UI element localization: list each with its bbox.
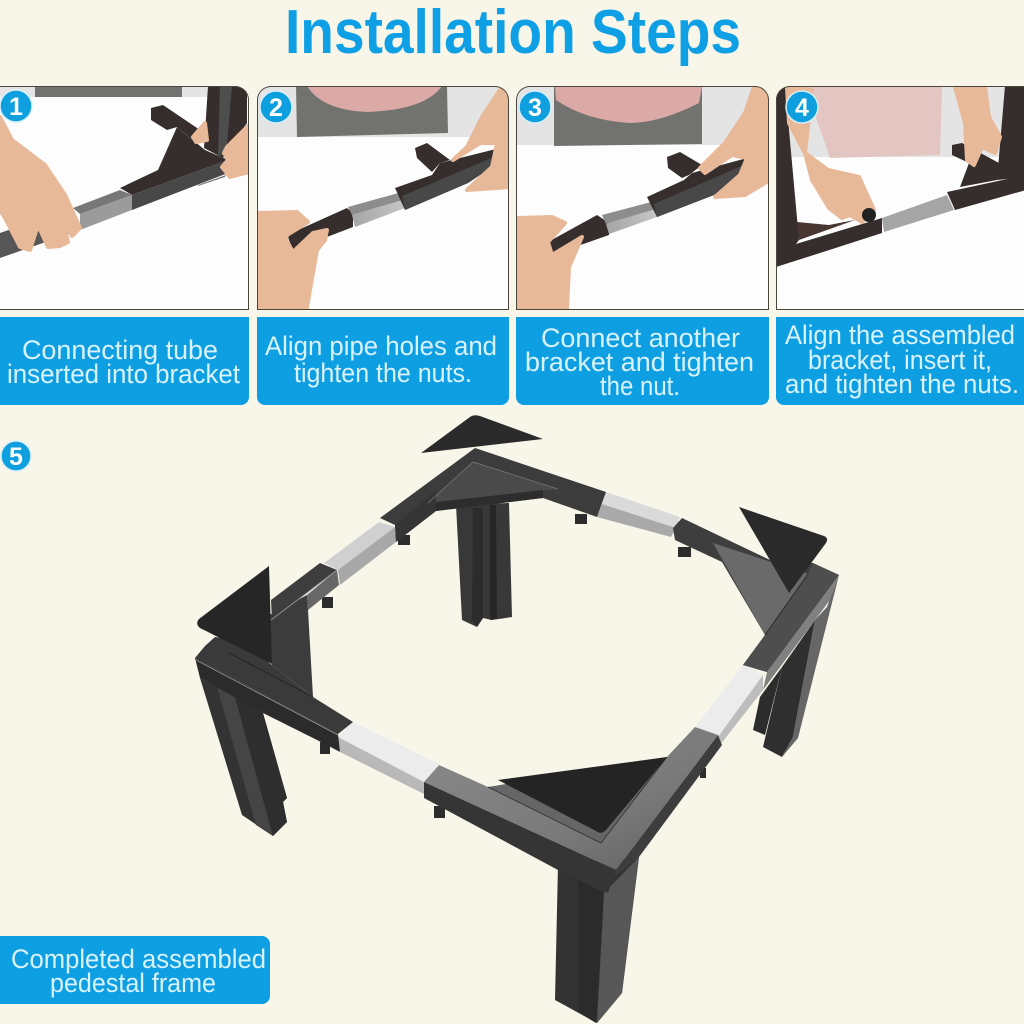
panel: step 3 photo: 3 bbox=[528, 94, 542, 122]
caption: step 5 bbox=[0, 936, 270, 1004]
anti-slip pad: right bbox=[739, 507, 827, 593]
panel: step 4 photo bbox=[776, 86, 1024, 310]
right leg bbox=[753, 575, 839, 757]
caption: step 2 bbox=[257, 317, 509, 405]
anti-slip pad: left bbox=[197, 566, 272, 664]
caption: step 5: Completed assembled bbox=[11, 944, 266, 974]
caption: step 1 bbox=[0, 317, 249, 405]
step 5 number badge: 5 bbox=[9, 443, 23, 471]
caption: step 5: pedestal frame bbox=[50, 968, 216, 998]
caption: step 3: bracket and tighten bbox=[525, 347, 754, 377]
front leg bbox=[555, 857, 639, 1023]
front bracket bbox=[424, 727, 722, 893]
caption: step 4: Align the assembled bbox=[785, 320, 1015, 350]
caption: step 1: inserted into bracket bbox=[7, 359, 240, 389]
anti-slip pad: front bbox=[498, 757, 667, 833]
anti-slip pad: top bbox=[421, 415, 543, 453]
panel: step 4 photo: 4 bbox=[795, 94, 809, 122]
panel: step 3 photo bbox=[516, 86, 770, 312]
panel: step 2 photo: 2 bbox=[269, 94, 283, 122]
caption: step 3 bbox=[516, 317, 769, 405]
left leg bbox=[200, 678, 287, 836]
adjuster bolts bbox=[320, 514, 706, 818]
right bracket bbox=[673, 518, 839, 690]
illustration: assembled pedestal frame bbox=[195, 415, 839, 1023]
caption: step 4 bbox=[776, 317, 1024, 405]
silver tubes bbox=[324, 492, 763, 794]
panel: step 1 photo: 1 bbox=[9, 93, 23, 121]
panel: step 1 photo bbox=[0, 86, 252, 310]
panel: step 2 photo bbox=[257, 86, 510, 312]
caption: step 4: and tighten the nuts. bbox=[785, 369, 1019, 399]
caption: step 2: Align pipe holes and bbox=[265, 331, 497, 361]
back leg bbox=[456, 503, 512, 627]
left bracket bbox=[195, 563, 353, 752]
caption: step 3: Connect another bbox=[541, 323, 740, 353]
title: Installation Steps bbox=[285, 0, 741, 67]
caption: step 4: bracket, insert it, bbox=[808, 345, 992, 375]
caption: step 2: tighten the nuts. bbox=[294, 358, 472, 388]
back bracket bbox=[380, 448, 606, 542]
step 5 number badge bbox=[1, 441, 31, 471]
caption: step 1: Connecting tube bbox=[22, 335, 218, 365]
caption: step 3: the nut. bbox=[600, 371, 680, 401]
